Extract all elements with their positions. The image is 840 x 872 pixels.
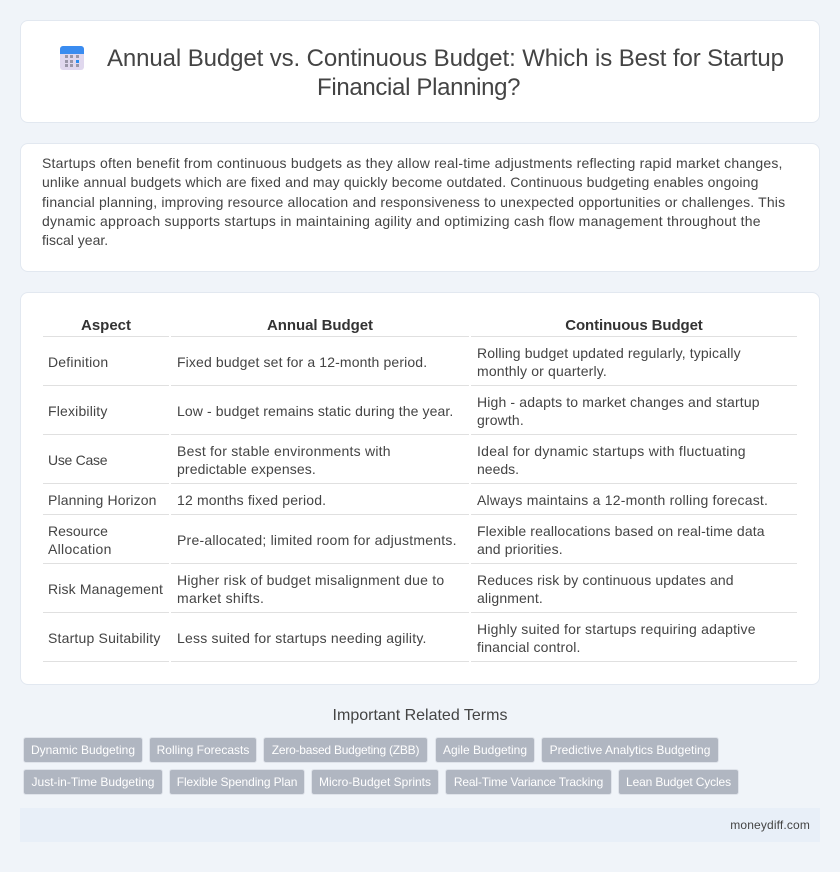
related terms tags: Flexible Spending Plan <box>177 775 297 789</box>
row: use case: Use Case <box>48 452 107 468</box>
intro text: fiscal year. <box>42 232 108 248</box>
intro text <box>42 155 785 248</box>
related terms tags <box>23 737 739 795</box>
row: risk management: alignment. <box>477 590 543 606</box>
row: flexibility: Flexibility <box>48 403 108 419</box>
row: resource allocation: and priorities. <box>477 541 563 557</box>
row: planning horizon: Always maintains a 12-month rolling forecast. <box>477 492 768 508</box>
row: definition: Rolling budget updated regularly, typically <box>477 345 741 361</box>
icon: calendar <box>60 46 84 70</box>
row: resource allocation: Pre-allocated; limited room for adjustments. <box>177 532 457 548</box>
row: startup suitability: Startup Suitability <box>48 630 161 646</box>
row: risk management <box>48 572 734 606</box>
row: planning horizon <box>48 492 768 508</box>
table header row: Continuous Budget <box>565 317 703 334</box>
related terms tags: Dynamic Budgeting <box>31 743 135 757</box>
row: planning horizon: Planning Horizon <box>48 492 157 508</box>
intro text: Startups often benefit from continuous budgets as they allow real-time adjustments reflecting rapid market changes, <box>42 155 783 171</box>
related terms tags: Agile Budgeting <box>443 743 527 757</box>
comparison table <box>43 317 797 662</box>
row: flexibility: growth. <box>477 412 524 428</box>
related terms tags: Rolling Forecasts <box>157 743 249 757</box>
row: resource allocation: Allocation <box>48 541 112 557</box>
related terms tags: Micro-Budget Sprints <box>319 775 431 789</box>
row: startup suitability: Less suited for startups needing agility. <box>177 630 427 646</box>
intro panel <box>20 143 820 272</box>
row: use case: needs. <box>477 461 519 477</box>
row: planning horizon: 12 months fixed period. <box>177 492 326 508</box>
related terms tags: Real-Time Variance Tracking <box>454 775 603 789</box>
table header row: Aspect <box>81 317 131 334</box>
row: resource allocation: Flexible reallocations based on real-time data <box>477 523 765 539</box>
intro text: dynamic approach supports startups in maintaining agility and optimizing cash flow management throughout the <box>42 213 761 229</box>
row: risk management: Reduces risk by continuous updates and <box>477 572 734 588</box>
row: startup suitability: financial control. <box>477 639 581 655</box>
row: use case: Best for stable environments with <box>177 443 391 459</box>
header panel <box>20 20 820 123</box>
table panel <box>20 292 820 685</box>
related terms tags: Zero-based Budgeting (ZBB) <box>272 743 419 757</box>
row: use case: Ideal for dynamic startups with fluctuating <box>477 443 746 459</box>
row: startup suitability: Highly suited for startups requiring adaptive <box>477 621 756 637</box>
row: flexibility <box>48 394 760 428</box>
intro text: unlike annual budgets which are fixed and may quickly become outdated. Continuous budgeting enables ongoing <box>42 174 759 190</box>
footer bar <box>20 808 820 842</box>
row: resource allocation <box>48 523 765 557</box>
related terms tags: Lean Budget Cycles <box>626 775 731 789</box>
row: risk management: market shifts. <box>177 590 264 606</box>
related terms tags: Predictive Analytics Budgeting <box>550 743 710 757</box>
intro text: financial planning, improving resource allocation and responsiveness to unexpected opportunities or challenges. This <box>42 194 785 210</box>
row: risk management: Risk Management <box>48 581 163 597</box>
related terms tags: Just-in-Time Budgeting <box>32 775 154 789</box>
row: resource allocation: Resource <box>48 523 108 539</box>
row: startup suitability <box>48 621 756 655</box>
table header row <box>81 317 703 334</box>
row: use case: predictable expenses. <box>177 461 316 477</box>
row: definition <box>48 345 741 379</box>
title <box>107 45 784 101</box>
row: risk management: Higher risk of budget misalignment due to <box>177 572 444 588</box>
row: definition: monthly or quarterly. <box>477 363 607 379</box>
row: flexibility: Low - budget remains static during the year. <box>177 403 453 419</box>
footer brand text: moneydiff.com <box>730 818 810 832</box>
row: definition: Definition <box>48 354 108 370</box>
title: Financial Planning? <box>317 74 520 101</box>
row: use case <box>48 443 746 477</box>
row: flexibility: High - adapts to market changes and startup <box>477 394 760 410</box>
table header row: Annual Budget <box>267 317 373 334</box>
title: Annual Budget vs. Continuous Budget: Which is Best for Startup <box>107 45 784 72</box>
related terms heading: Important Related Terms <box>333 707 507 724</box>
row: definition: Fixed budget set for a 12-month period. <box>177 354 427 370</box>
